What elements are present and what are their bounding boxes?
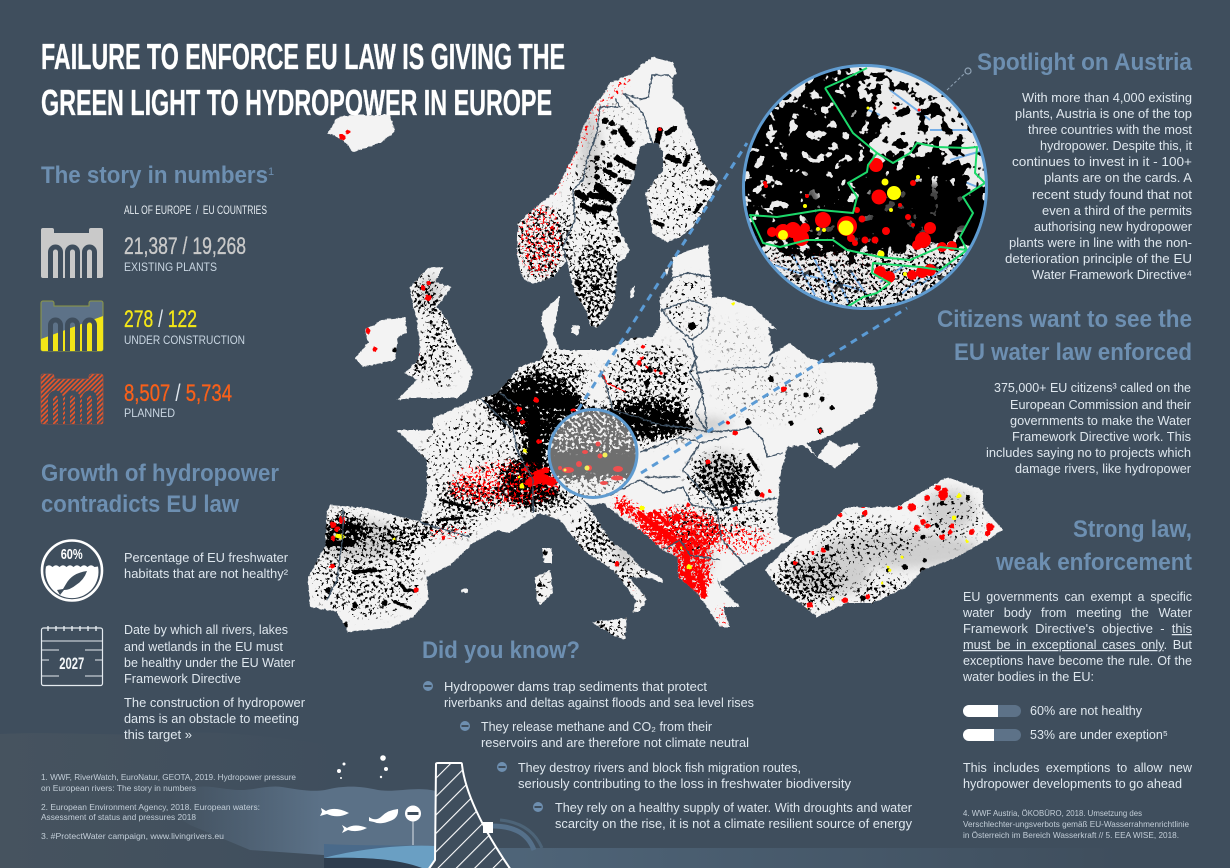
green country borders [750, 68, 985, 307]
text: exemptions paragraph: must be in exceptional cases only . But [963, 638, 1193, 652]
reservoir floor [324, 844, 436, 868]
did you know: climate [533, 801, 913, 831]
text: 2027 deadline: The construction of hydropower [124, 696, 305, 710]
red plant density [419, 78, 771, 627]
reservoir water [150, 787, 436, 855]
did you know: sediments: riverbanks and deltas against floods and sea level rises [444, 696, 754, 710]
solid red clusters [530, 470, 704, 596]
text: Austria paragraph: three countries with the most [1028, 123, 1193, 137]
heading: the story in numbers: The story in numbers [41, 162, 268, 189]
bottom background wave [0, 733, 1130, 868]
heading: strong law: weak enforcement [995, 549, 1192, 576]
text: Austria paragraph: recent study found that not [1032, 188, 1193, 202]
text: Austria paragraph: Water Framework Directive⁴ [1032, 268, 1192, 282]
footnotes right: Verschlechter-ungsverbots gemäß EU-Wasserrahmenrichtlinie [963, 819, 1189, 829]
stat: planned: PLANNED [124, 406, 175, 420]
text: citizens paragraph: Framework Directive work. This [1012, 430, 1191, 444]
did you know: methane [460, 720, 749, 750]
heading: did you know: Did you know? [422, 637, 580, 664]
stat: existing plants: 21,387 / 19,268 [124, 233, 246, 260]
fine dots in the southern valleys [750, 250, 990, 310]
text: Austria paragraph [1005, 91, 1193, 282]
footnotes right: 4. WWF Austria, ÖKOBÜRO, 2018. Umsetzung des [963, 808, 1142, 818]
text: exemptions paragraph: exceptions have become the rule. Of the [963, 654, 1192, 668]
icon: planned dam [41, 374, 103, 424]
did you know: methane: They release methane and CO₂ from their [481, 720, 712, 734]
no entry sign [405, 806, 421, 845]
bubbles [337, 755, 388, 779]
heading: the story in numbers: 1 [268, 166, 274, 178]
text: citizens paragraph [986, 381, 1191, 476]
icon: dam under construction [41, 301, 103, 351]
text: 2027 deadline: this target » [124, 728, 192, 742]
heading: growth of hydropower: contradicts EU law [41, 491, 240, 518]
text: 2027 deadline: Framework Directive [124, 672, 241, 686]
progress bar: 60% not healthy [963, 704, 1143, 718]
text: Austria paragraph: even a third of the permits [1042, 204, 1192, 218]
spotlight circle: Austria map [735, 60, 990, 310]
text: exemptions conclusion [963, 761, 1193, 791]
text: Austria paragraph: hydropower. Despite this, it [1040, 139, 1193, 153]
text: 2027 deadline: be healthy under the EU Water [124, 656, 295, 670]
text: 2027 deadline [124, 623, 305, 742]
icon: calendar 2027 [42, 626, 102, 686]
text: exemptions paragraph: Framework Directive's objective - this [963, 622, 1192, 636]
heading: strong law [995, 516, 1192, 576]
stat: existing plants [124, 233, 246, 274]
title [41, 36, 565, 123]
footnotes left: Assessment of status and pressures 2018 [41, 812, 196, 822]
text: exemptions conclusion: hydropower developments to go ahead [963, 777, 1182, 791]
text: citizens paragraph: damage rivers, like hydropower [1015, 462, 1191, 476]
black plant coverage [735, 60, 990, 255]
red hydropower plants [763, 106, 957, 283]
heading: growth of hydropower [41, 460, 279, 518]
icon: calendar 2027: 2027 [59, 654, 84, 673]
text: Austria paragraph: With more than 4,000 existing [1022, 91, 1192, 105]
stat: existing plants: EXISTING PLANTS [124, 260, 217, 274]
stat: under construction: 278 / 122 [124, 306, 197, 333]
text: citizens paragraph: includes saying no to projects which [986, 446, 1191, 460]
yellow plants under construction [778, 106, 920, 276]
river and dam illustration [150, 755, 542, 868]
text: freshwater habitats: Percentage of EU freshwater [124, 551, 288, 565]
did you know: climate: scarcity on the rise, it is not a climate resilient source of energy [555, 817, 913, 831]
footnotes left [41, 772, 296, 841]
text: exemptions conclusion: This includes exemptions to allow new [963, 761, 1193, 775]
text: 2027 deadline: dams is an obstacle to meeting [124, 712, 299, 726]
heading: growth of hydropower: Growth of hydropower [41, 460, 279, 487]
title: GREEN LIGHT TO HYDROPOWER IN EUROPE [41, 82, 552, 123]
stat: under construction [124, 306, 245, 347]
stat: under construction: UNDER CONSTRUCTION [124, 333, 245, 347]
icon: 60 percent fish: 60% [61, 546, 83, 563]
footnotes right: in Österreich im Bereich Wasserkraft // 5. EEA WISE, 2018. [963, 830, 1179, 840]
heading: citizens: Citizens want to see the [937, 306, 1192, 333]
text: 2027 deadline: and wetlands in the EU must [124, 640, 284, 654]
heading: citizens: EU water law enforced [954, 339, 1192, 366]
icon: existing dam [41, 228, 103, 278]
column labels: ALL OF EUROPE / EU COUNTRIES [124, 205, 267, 217]
did you know: climate: They rely on a healthy supply of water. With droughts and water [555, 801, 912, 815]
rivers [775, 90, 985, 305]
small locator circle on Austria [545, 405, 641, 500]
spotlight pointer [947, 68, 971, 90]
black plant density [310, 100, 985, 640]
text: freshwater habitats [124, 551, 288, 581]
text: exemptions paragraph: EU governments can exempt a specific [963, 590, 1192, 604]
country borders [327, 75, 783, 600]
dashed connector lines [578, 143, 907, 473]
progress bar: 60% not healthy: 60% are not healthy [1030, 704, 1143, 718]
hillshade relief [320, 110, 980, 595]
progress bar: 53% under exemption: 53% are under exeption⁵ [1030, 728, 1168, 742]
text: exemptions paragraph: water bodies in the EU: [962, 670, 1094, 684]
text: Austria paragraph: plants are on the cards. A [1044, 171, 1193, 185]
title: FAILURE TO ENFORCE EU LAW IS GIVING THE [41, 36, 565, 77]
dam wall [428, 763, 511, 868]
footnotes left: 1. WWF, RiverWatch, EuroNatur, GEOTA, 2019. Hydropower pressure [41, 772, 296, 782]
red, black and yellow plants [325, 118, 970, 636]
text: Austria paragraph: plants were in line with the non- [1009, 236, 1192, 250]
progress bar: 53% under exemption [963, 728, 1168, 742]
black plant streaks [325, 128, 758, 608]
fish group [320, 808, 398, 833]
text: citizens paragraph: European Commission and their [1010, 398, 1191, 412]
footnotes left: on European rivers: The story in numbers [41, 783, 196, 793]
did you know: methane: reservoirs and are therefore not climate neutral [481, 736, 749, 750]
dam outlet [483, 822, 493, 833]
icon: 60 percent fish [42, 540, 102, 600]
text: Austria paragraph: deterioration principle of the EU [1005, 252, 1192, 266]
text: Austria paragraph: authorising new hydropower [1034, 220, 1192, 234]
text: Austria paragraph: plants, Austria is one of the top [1015, 107, 1192, 121]
text: Austria paragraph: continues to invest in it - 100+ [1012, 155, 1192, 169]
stat: planned: 8,507 / 5,734 [124, 380, 232, 407]
did you know: fish migration: seriously contributing to the loss in freshwater biodiversity [518, 777, 852, 791]
map of Europe [308, 57, 1003, 640]
footnotes right [963, 808, 1189, 840]
heading: spotlight on Austria: Spotlight on Austria [977, 49, 1192, 76]
text: citizens paragraph: 375,000+ EU citizens³ called on the [994, 381, 1191, 395]
did you know: sediments: Hydropower dams trap sediments that protect [444, 680, 708, 694]
footnotes left: 2. European Environment Agency, 2018. European waters: [41, 802, 260, 812]
did you know: fish migration: They destroy rivers and block fish migration routes, [518, 761, 801, 775]
text: exemptions paragraph: water body from meeting the Water [962, 606, 1192, 620]
did you know: sediments [423, 680, 754, 710]
text: exemptions paragraph [962, 590, 1193, 684]
text: freshwater habitats: habitats that are not healthy² [124, 567, 288, 581]
text: citizens paragraph: governments to make the Water [1010, 414, 1191, 428]
heading: strong law: Strong law, [1073, 516, 1192, 543]
outflow pipe [492, 826, 534, 850]
stat: planned [124, 380, 232, 420]
text: 2027 deadline: Date by which all rivers, lakes [124, 623, 288, 637]
heading: citizens [937, 306, 1192, 366]
did you know: fish migration [497, 761, 852, 791]
footnotes left: 3. #ProtectWater campaign, www.livingrivers.eu [41, 831, 224, 841]
